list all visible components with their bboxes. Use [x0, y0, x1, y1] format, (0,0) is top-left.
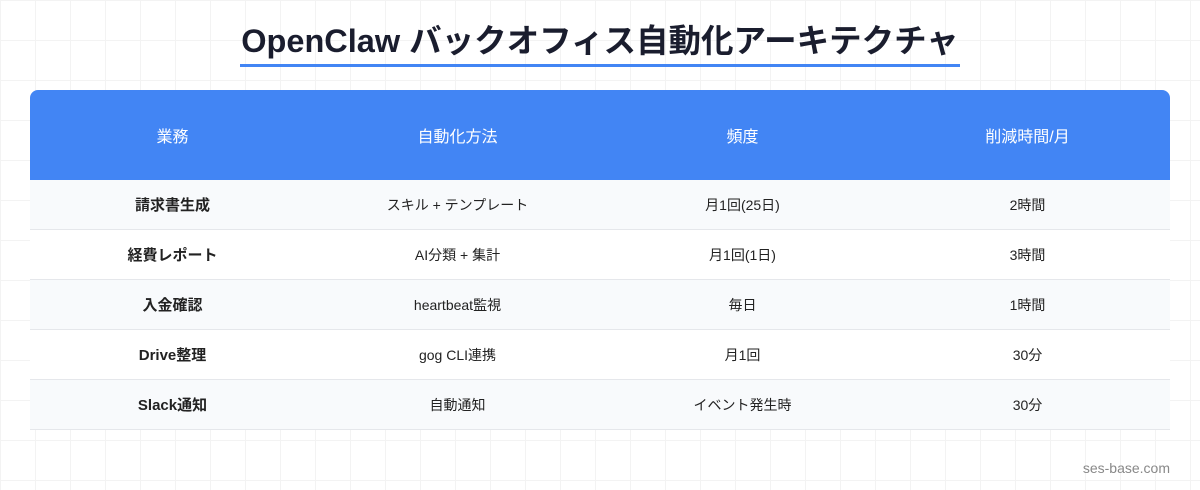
row: Slack通知: Slack通知 — [138, 397, 207, 414]
row: Slack通知: イベント発生時 — [694, 396, 792, 412]
row: Drive整理 — [30, 330, 1170, 380]
row: 経費レポート — [30, 230, 1170, 280]
row: 入金確認: 1時間 — [1010, 296, 1045, 312]
row: 入金確認: 入金確認 — [142, 297, 202, 314]
row: 入金確認: 毎日 — [728, 296, 756, 312]
table header: 削減時間/月 — [985, 129, 1070, 146]
row: 請求書生成 — [30, 180, 1170, 230]
table header: 自動化方法 — [417, 129, 498, 146]
row: 入金確認 — [30, 280, 1170, 330]
row: Drive整理: 月1回 — [725, 346, 760, 362]
row: Drive整理: 30分 — [1013, 346, 1042, 362]
table — [30, 90, 1170, 430]
row: Drive整理: Drive整理 — [139, 347, 206, 364]
row: Slack通知: 30分 — [1013, 396, 1042, 412]
row: Slack通知: 自動通知 — [430, 396, 486, 412]
row: Slack通知 — [30, 380, 1170, 430]
row: 請求書生成: 請求書生成 — [135, 197, 210, 214]
row: 請求書生成: スキル + テンプレート — [387, 196, 528, 212]
row: Drive整理: gog CLI連携 — [419, 346, 496, 362]
table header: 頻度 — [726, 129, 758, 146]
row: 経費レポート: 月1回(1日) — [709, 246, 776, 262]
row: 経費レポート: AI分類 + 集計 — [415, 246, 500, 262]
row: 入金確認: heartbeat監視 — [414, 296, 501, 312]
table header — [30, 90, 1170, 180]
row: 経費レポート: 経費レポート — [127, 247, 218, 264]
row: 請求書生成: 2時間 — [1010, 196, 1045, 212]
title: OpenClaw バックオフィス自動化アーキテクチャ — [241, 23, 959, 59]
row: 請求書生成: 月1回(25日) — [705, 196, 780, 212]
table header: 業務 — [156, 129, 188, 146]
footer credit: ses-base.com — [1083, 460, 1170, 476]
row: 経費レポート: 3時間 — [1010, 246, 1045, 262]
